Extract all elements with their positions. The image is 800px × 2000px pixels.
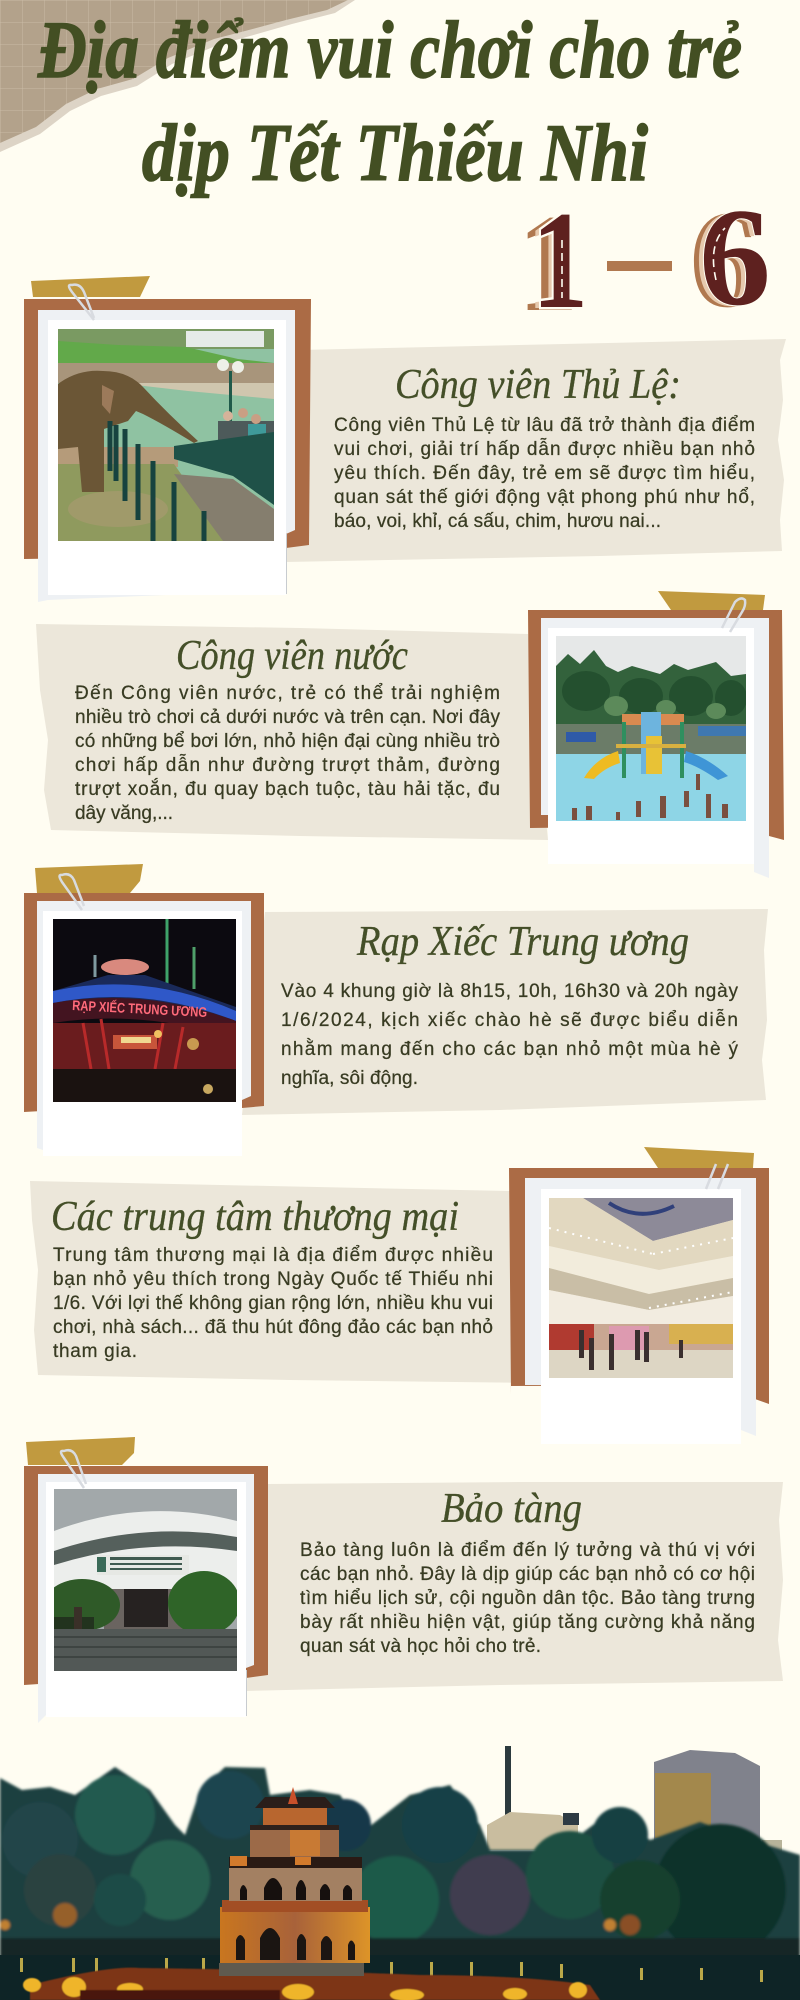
date 1-6: 6: [689, 182, 761, 337]
torn paper corner: [0, 0, 355, 152]
text strip 3: [242, 909, 768, 1115]
body text 3: nhằm mang đến cho các bạn nhỏ một mùa hè ý: [281, 1038, 738, 1060]
body text 1: vui chơi, giải trí hấp dẫn được nhiều bạn nhỏ: [334, 438, 755, 460]
body text 5: [300, 1540, 755, 1657]
body text 2: dây văng,...: [75, 803, 173, 824]
photo frame 5: [24, 1437, 268, 1723]
body text 5: bày rất nhiều hiện vật, giúp tăng cường khả năng: [300, 1612, 755, 1633]
body text 2: Đến Công viên nước, trẻ có thể trải nghiệm: [75, 683, 500, 704]
heading 5: Bảo tàng: [441, 1486, 582, 1532]
panel: Công viên Thủ Lệ: [24, 276, 786, 602]
body text 5: các bạn nhỏ. Đây là dịp giúp các bạn nhỏ có cơ hội: [300, 1564, 755, 1585]
photo: Hoan Kiem lake and Turtle Tower: [0, 1746, 800, 2000]
heading 4: Các trung tâm thương mại: [51, 1194, 459, 1240]
body text 2: trượt xoắn, đu quay bạch tuộc, tàu hải tặc, đu: [75, 778, 500, 800]
date 1-6: [518, 180, 771, 341]
distant buildings: [365, 1746, 782, 1852]
date 1-6: 6: [694, 181, 766, 336]
body text 5: tìm hiểu lịch sử, cội nguồn dân tộc. Bảo tàng trưng: [300, 1588, 755, 1609]
panel: Công viên nước: [36, 591, 784, 878]
body text 1: Công viên Thủ Lệ từ lâu đã trở thành địa điểm: [334, 415, 755, 436]
text strip 5: [246, 1482, 783, 1691]
body text 4: [53, 1245, 493, 1362]
heading 1: Công viên Thủ Lệ:: [395, 362, 681, 408]
body text 4: Trung tâm thương mại là địa điểm được nhiều: [53, 1245, 493, 1266]
body text 1: quan sát thế giới động vật phong phú như hổ,: [334, 487, 755, 508]
Turtle Tower: [219, 1787, 370, 1976]
body text 4: chơi, nhà sách... đã thu hút đông đảo các bạn nhỏ: [53, 1317, 493, 1338]
photo: elephant at the zoo: [58, 329, 274, 541]
heading 3: Rạp Xiếc Trung ương: [356, 919, 689, 965]
body text 4: bạn nhỏ yêu thích trong Ngày Quốc tế Thiếu nhi: [53, 1269, 493, 1290]
panel: Các trung tâm thương mại: [30, 1147, 769, 1444]
photo: circus at night: RẠP XIẾC TRUNG ƯƠNG: [72, 997, 208, 1020]
text strip 4: [30, 1181, 541, 1383]
photo: museum: [54, 1489, 237, 1671]
body text 3: nghĩa, sôi động.: [281, 1068, 418, 1089]
photo frame 1: [24, 276, 311, 602]
flower island: [23, 1968, 600, 2000]
photo frame 4: [509, 1147, 769, 1444]
body text 3: 1/6/2024, kịch xiếc chào hè sẽ được biểu diễn: [281, 1009, 738, 1031]
photo frame 2: [528, 591, 784, 878]
date 1-6: 1: [532, 183, 588, 338]
photo: circus at night: [53, 919, 236, 1102]
text strip 2: [36, 624, 548, 840]
body text 5: quan sát và học hỏi cho trẻ.: [300, 1636, 541, 1657]
body text 1: yêu thích. Đến đây, trẻ em sẽ được tìm hiểu,: [334, 463, 755, 484]
body text 5: Bảo tàng luôn là điểm đến lý tưởng và thú vị với: [300, 1540, 755, 1561]
panel: Rạp Xiếc Trung ương: [24, 864, 768, 1156]
body text 1: báo, voi, khỉ, cá sấu, chim, hươu nai...: [334, 511, 661, 532]
body text 2: [75, 683, 500, 824]
date 1-6: 1: [526, 184, 584, 339]
text strip 1: [286, 339, 786, 562]
date 1-6: 1: [518, 186, 578, 341]
photo frame 3: [24, 864, 264, 1156]
photo: water park: [556, 636, 746, 821]
photo: shopping mall: [549, 1198, 733, 1378]
heading 2: Công viên nước: [176, 633, 408, 679]
title: dịp Tết Thiếu Nhi: [142, 107, 648, 198]
body text 2: chơi hấp dẫn như đường trượt thảm, đường: [75, 754, 500, 776]
body text 1: [334, 415, 755, 532]
title: [37, 4, 742, 198]
tree line: [0, 1767, 800, 1960]
date 1-6: 6: [699, 180, 771, 335]
body text 3: Vào 4 khung giờ là 8h15, 10h, 16h30 và 20h ngày: [281, 981, 738, 1002]
body text 4: tham gia.: [53, 1341, 137, 1362]
lake water: [0, 1955, 800, 2000]
body text 4: 1/6. Với lợi thế không gian rộng lớn, nhiều khu vui: [53, 1293, 493, 1314]
panel: Bảo tàng: [24, 1437, 783, 1723]
body text 2: có những bể bơi lớn, nhỏ hiện đại cùng nhiều trò: [75, 731, 500, 752]
body text 3: [281, 981, 738, 1089]
body text 2: nhiều trò chơi cả dưới nước và trên cạn. Nơi đây: [75, 707, 500, 728]
